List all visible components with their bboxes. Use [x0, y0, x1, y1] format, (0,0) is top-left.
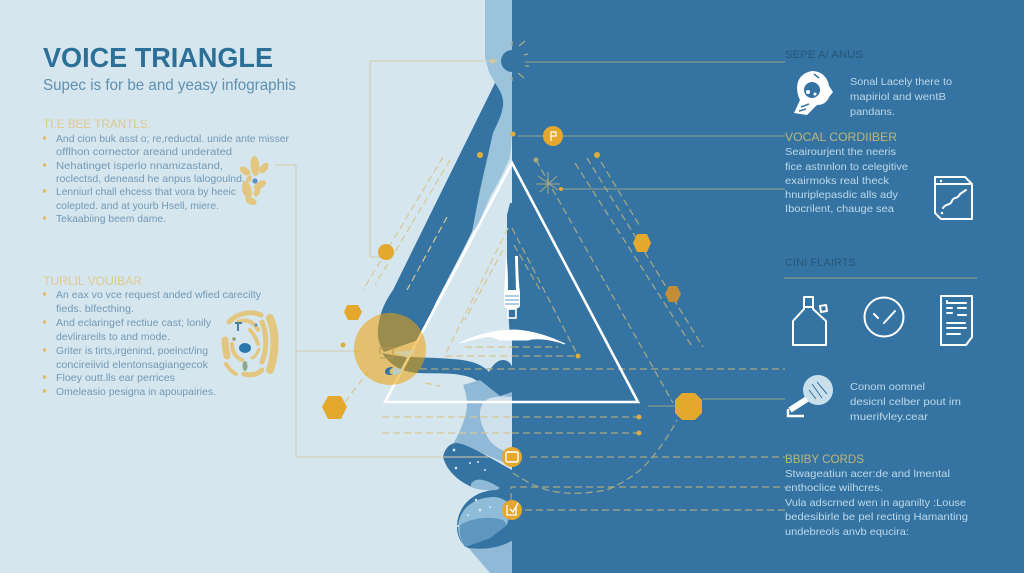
description: muerifvley.cear — [850, 411, 929, 423]
body lines: Lenniurl chall ehcess that vora by heeic — [56, 186, 236, 198]
body lines: And eclaringef rectiue cast; lonily — [56, 317, 212, 329]
description: Sonal Lacely there to — [850, 76, 952, 88]
section: sepe anus — [785, 49, 952, 118]
icon: clock — [864, 298, 904, 336]
node — [675, 393, 702, 420]
description: enthoclice wilhcres. — [785, 482, 883, 494]
heading: VOCAL CORDIIBER — [785, 132, 897, 144]
description: Ibocrilent, chauge sea — [785, 203, 894, 215]
description: pandans. — [850, 106, 895, 118]
body lines: Griter is tirts,irgenind, poelnct/ing — [56, 345, 208, 357]
lower lip — [457, 490, 513, 549]
icon: small starburst — [536, 172, 560, 194]
title: VOICE TRIANGLE — [43, 42, 273, 73]
body lines: Nehatinget isperlo nnamizastand, — [56, 160, 223, 172]
body lines: roclectsd, deneasd he anpus lalogoulnd. — [56, 173, 245, 185]
description — [850, 76, 952, 118]
node — [378, 244, 394, 260]
illustration: face profile — [378, 0, 513, 573]
body lines — [56, 289, 262, 398]
bullets — [43, 292, 46, 393]
icon: microphone inside triangle — [504, 255, 520, 318]
icon: chart window — [935, 177, 972, 219]
section: bbiby cords — [785, 454, 968, 538]
description: undebreols anvb equcira: — [785, 526, 909, 538]
description — [785, 468, 968, 538]
description: hnuriplepasdic alls ady — [785, 189, 899, 201]
description: mapiriol and wentB — [850, 91, 946, 103]
lower lip fill — [458, 497, 511, 547]
description — [850, 381, 961, 423]
description: Seairourjent the neeris — [785, 146, 896, 158]
section: vocal cordiiber — [785, 132, 972, 219]
white arc — [460, 330, 565, 344]
speckled lip area — [460, 518, 507, 547]
panel: right dark background — [512, 0, 1024, 573]
icon: bottle — [793, 297, 827, 345]
icon: microphone — [788, 375, 833, 416]
light lip gap — [471, 480, 500, 491]
dashed guide lines — [345, 157, 703, 433]
chin — [466, 535, 512, 573]
dark burst node — [491, 41, 529, 81]
nostril and tongue shape — [382, 353, 513, 396]
speckles — [453, 449, 491, 527]
divider — [784, 277, 977, 279]
body lines: Omeleasio pesigna in apoupairies. — [56, 386, 216, 398]
heading: BBIBY CORDS — [785, 454, 864, 466]
body lines — [56, 133, 289, 225]
body lines: fieds. blfecthing. — [56, 303, 134, 315]
text block: turlil vouibar — [43, 276, 262, 398]
connector lines — [275, 61, 785, 510]
light blue forehead band — [462, 0, 512, 232]
description: Stwageatiun acer:de and lmental — [785, 468, 950, 480]
gold circle overlay — [354, 313, 426, 385]
description: fice astnnlon to celegitive — [785, 161, 908, 173]
heading: CINI FLAIRTS — [785, 257, 856, 269]
body lines: colepted. and at yourb Hsell, miere. — [56, 200, 219, 212]
node — [322, 396, 347, 419]
description: desicnl celber pout im — [850, 396, 961, 408]
section: cini flairts — [784, 257, 977, 423]
icon: gold pattern emblem — [225, 313, 274, 375]
icon: document — [941, 296, 972, 345]
body lines: Tekaabiing beem dame. — [56, 213, 166, 225]
body lines: concireiivid elentonsagiangecok — [56, 359, 209, 371]
node — [344, 305, 362, 320]
small dots — [340, 132, 642, 436]
body lines: devlirareils to and mode. — [56, 331, 170, 343]
subtitle: Supec is for be and yeasy infographis — [43, 77, 296, 94]
small nose marks — [380, 348, 417, 375]
description: bedesibirle be pel recting Hamanting — [785, 511, 968, 523]
dark sliver at centre — [507, 203, 513, 340]
body lines: An eax vo vce request anded wfied carecilty — [56, 289, 262, 301]
description: Conom oomnel — [850, 381, 925, 393]
heading: SEPE A/ ANUS — [785, 49, 863, 61]
icon: head — [794, 71, 833, 115]
description: exairmoks real theck — [785, 175, 890, 187]
description: Vula adscrned wen in aganilty :Louse — [785, 497, 966, 509]
bullets — [43, 136, 46, 220]
dark nose strip — [378, 83, 503, 352]
icon: gold leaf sprig — [238, 156, 270, 207]
upper lip — [443, 443, 512, 492]
icon: gold node with note — [543, 126, 563, 146]
gold nodes — [322, 132, 702, 436]
body lines: offlhon cornector areand underated — [56, 146, 232, 158]
heading: TI.E BEE TRANTLS. — [43, 119, 151, 131]
heading: TURLIL VOUIBAR — [43, 276, 142, 288]
body lines: Floey outt.lls ear perrices — [56, 372, 175, 384]
pale inner cheek — [480, 396, 512, 454]
nose bridge shape — [453, 380, 512, 466]
icon: gold node with cup — [502, 447, 522, 467]
node — [633, 234, 651, 252]
node — [665, 286, 681, 302]
text block: the bee trantls — [43, 119, 289, 225]
description — [785, 146, 908, 215]
icon: gold node with check — [502, 500, 522, 520]
white voice triangle — [385, 163, 638, 402]
body lines: And cion buk asst o; re,reductal. unide ante misser — [56, 133, 289, 145]
